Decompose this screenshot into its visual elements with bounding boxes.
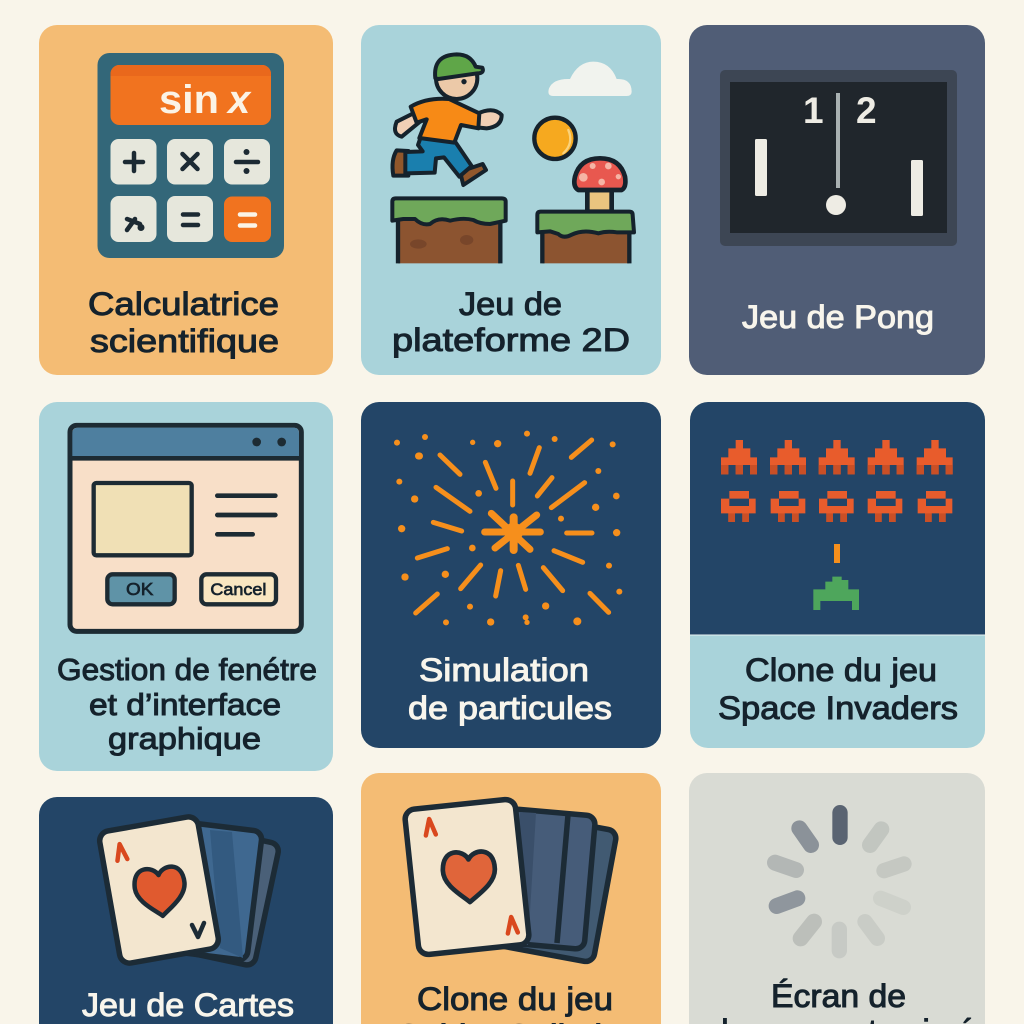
- panel: calculatrice scientifique: [39, 25, 333, 375]
- icon: calculator: [98, 53, 284, 258]
- icon: playing cards: [404, 799, 617, 963]
- heading: clone cartes: [397, 981, 633, 1024]
- heading: gestion de fenetre: Gestion de fenétre: [57, 652, 317, 687]
- heading: ecran de chargement: [705, 978, 975, 1024]
- heading: clone space invaders: Clone du jeu: [745, 652, 937, 688]
- panel: simulation de particules: [361, 402, 661, 748]
- icon: particle burst: [394, 431, 622, 626]
- heading: jeu de cartes: Jeu de Cartes: [82, 987, 294, 1023]
- icon: calculator: x: [226, 78, 252, 122]
- illustration: platformer scene: [392, 54, 634, 263]
- icon: playing cards: [98, 815, 280, 967]
- heading: gestion de fenetre: [57, 652, 317, 756]
- heading: ecran de chargement: Écran de: [771, 978, 906, 1014]
- icon: mushroom: [574, 158, 625, 212]
- icon: window: [70, 425, 301, 631]
- platform: left: [392, 198, 506, 263]
- panel: jeu de plateforme 2D: [361, 25, 661, 375]
- panel: clone cartes: [361, 773, 661, 1024]
- character: runner: [393, 54, 502, 185]
- heading: clone space invaders: [718, 652, 958, 726]
- icon: pong screen: 1: [803, 90, 824, 131]
- icon: invaders game: [721, 440, 953, 610]
- panel: jeu de cartes: [39, 797, 333, 1024]
- icon: window: OK: [126, 579, 153, 599]
- heading: calculatrice scientifique: Calculatrice: [88, 286, 279, 322]
- panel: gestion de fenetre: [39, 402, 333, 771]
- heading: simulation de particules: de particules: [408, 690, 612, 726]
- icon: loading spinner: [775, 813, 904, 951]
- heading: clone cartes: Clone du jeu: [417, 981, 613, 1017]
- heading: clone space invaders: Space Invaders: [718, 690, 958, 726]
- panel: ecran de chargement: [689, 773, 985, 1024]
- heading: jeu de plateforme 2D: plateforme 2D: [392, 322, 630, 358]
- icon: calculator: sin: [159, 78, 219, 122]
- icon: window: Cancel: [210, 580, 266, 599]
- icon: cloud: [548, 62, 632, 96]
- heading: gestion de fenetre: et d’interface: [89, 687, 281, 722]
- heading: jeu de pong: Jeu de Pong: [742, 299, 934, 335]
- heading: jeu de plateforme 2D: Jeu de: [459, 286, 562, 322]
- platform: right: [537, 212, 634, 263]
- heading: simulation de particules: Simulation: [419, 652, 589, 688]
- panel: jeu de pong: [689, 25, 985, 375]
- heading: calculatrice scientifique: scientifique: [90, 323, 279, 359]
- icon: pong screen: [720, 70, 957, 246]
- icon: pong screen: 2: [856, 90, 877, 131]
- heading: simulation de particules: [408, 652, 612, 726]
- heading: jeu de plateforme 2D: [392, 286, 630, 358]
- icon: coin: [534, 118, 576, 159]
- panel: clone space invaders: [690, 402, 985, 748]
- heading: gestion de fenetre: graphique: [108, 721, 261, 756]
- heading: calculatrice scientifique: [88, 286, 279, 359]
